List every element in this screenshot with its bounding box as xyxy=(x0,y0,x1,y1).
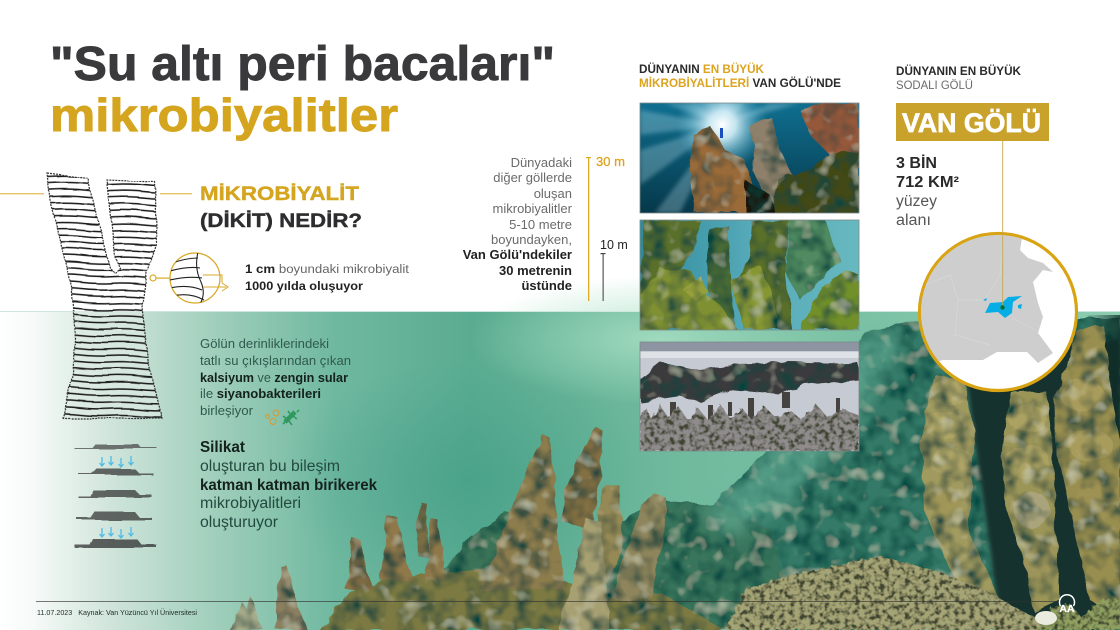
text: growth rate xyxy=(245,262,410,293)
microbialite drawing xyxy=(47,173,162,418)
text: growth rate: 1000 yılda oluşuyor xyxy=(245,279,363,293)
text: silicate layering: oluşturuyor xyxy=(200,514,278,531)
height scale: 10 m: 10 m xyxy=(600,238,628,252)
lake surface area xyxy=(896,155,959,229)
text: height comparison xyxy=(463,155,573,293)
text: formation in the lake: kalsiyum ve zengin sular xyxy=(200,370,348,385)
heading: what is a microbialite: MİKROBİYALİT xyxy=(200,184,359,205)
text: height comparison: Van Gölü'ndekiler xyxy=(463,247,572,262)
Van Gölü label: VAN GÖLÜ xyxy=(902,108,1041,138)
lake surface area: 3 BİN xyxy=(896,155,937,172)
photo 1: rock towers against sun xyxy=(640,103,859,213)
text: height comparison: diğer göllerde xyxy=(493,170,572,185)
AA logo xyxy=(1059,595,1075,615)
lake heading: SODALI GÖLÜ xyxy=(896,80,973,92)
text: formation in the lake: Gölün derinliklerindeki xyxy=(200,336,329,351)
text: height comparison: 30 metrenin xyxy=(499,263,572,278)
text: height comparison: boyundayken, xyxy=(491,232,572,247)
title xyxy=(50,38,555,141)
text: silicate layering: katman katman birikerek xyxy=(200,477,377,494)
location map of Van Lake xyxy=(900,141,1076,390)
lake heading xyxy=(896,63,1021,92)
heading: what is a microbialite xyxy=(200,184,362,232)
column A xyxy=(921,375,1000,605)
text: formation in the lake: birleşiyor xyxy=(200,403,254,418)
source note: 11.07.2023 Kaynak: Van Yüzüncü Yıl Üniversitesi xyxy=(37,608,197,617)
column C xyxy=(1054,326,1120,620)
text: height comparison: 5-10 metre xyxy=(509,217,572,232)
photo 3: towers in shallow water xyxy=(640,342,859,451)
footer rule xyxy=(36,601,1060,602)
photos heading: DÜNYANIN EN BÜYÜK xyxy=(639,61,764,76)
lake surface area: 712 KM² xyxy=(896,174,959,191)
text: formation in the lake xyxy=(200,336,351,418)
photos heading xyxy=(639,61,841,90)
text: growth rate: 1 cm boyundaki mikrobiyalit xyxy=(245,262,410,276)
shadow between columns xyxy=(965,340,1120,620)
lake heading: DÜNYANIN EN BÜYÜK xyxy=(896,63,1021,78)
sediment layer diagrams xyxy=(74,444,157,548)
text: silicate layering xyxy=(200,439,377,531)
text: silicate layering: oluşturan bu bileşim xyxy=(200,458,340,475)
height scale: 10 m xyxy=(600,238,628,301)
photos heading: MİKROBİYALİTLERİ VAN GÖLÜ'NDE xyxy=(639,75,841,90)
pale base of column xyxy=(1035,611,1057,625)
photo frames xyxy=(640,103,859,451)
text: height comparison: Dünyadaki xyxy=(511,155,572,170)
photo 2: green tower group xyxy=(640,220,859,330)
underwater background xyxy=(0,275,1120,630)
icon: bubbles and bacteria xyxy=(266,410,299,425)
text: height comparison: üstünde xyxy=(521,278,572,293)
text: height comparison: mikrobiyalitler xyxy=(493,201,573,216)
column B xyxy=(1002,391,1060,612)
lake surface area: alanı xyxy=(896,212,931,229)
heading: what is a microbialite: (DİKİT) NEDİR? xyxy=(200,211,362,232)
text: silicate layering: Silikat xyxy=(200,439,245,456)
left accent lines xyxy=(0,193,192,194)
bottom mound, right xyxy=(725,556,1120,630)
height scale: 30 m: 30 m xyxy=(596,154,625,169)
title: mikrobiyalitler xyxy=(50,89,398,141)
left bottom mound xyxy=(320,570,725,630)
underwater photo: microbialite rocks xyxy=(230,315,1120,630)
text: formation in the lake: ile siyanobakterileri xyxy=(200,386,321,401)
soft water haze over slope edge xyxy=(700,330,905,540)
far dark teal slope xyxy=(430,318,1120,630)
text: formation in the lake: tatlı su çıkışlarından çıkan xyxy=(200,353,351,368)
magnifier detail icon xyxy=(150,252,228,304)
text: height comparison: oluşan xyxy=(534,186,572,201)
title: "Su altı peri bacaları" xyxy=(50,38,555,91)
AA logo: AA xyxy=(1059,603,1075,615)
spires xyxy=(230,426,666,630)
text: silicate layering: mikrobiyalitleri xyxy=(200,495,301,512)
lake surface area: yüzey xyxy=(896,193,937,210)
